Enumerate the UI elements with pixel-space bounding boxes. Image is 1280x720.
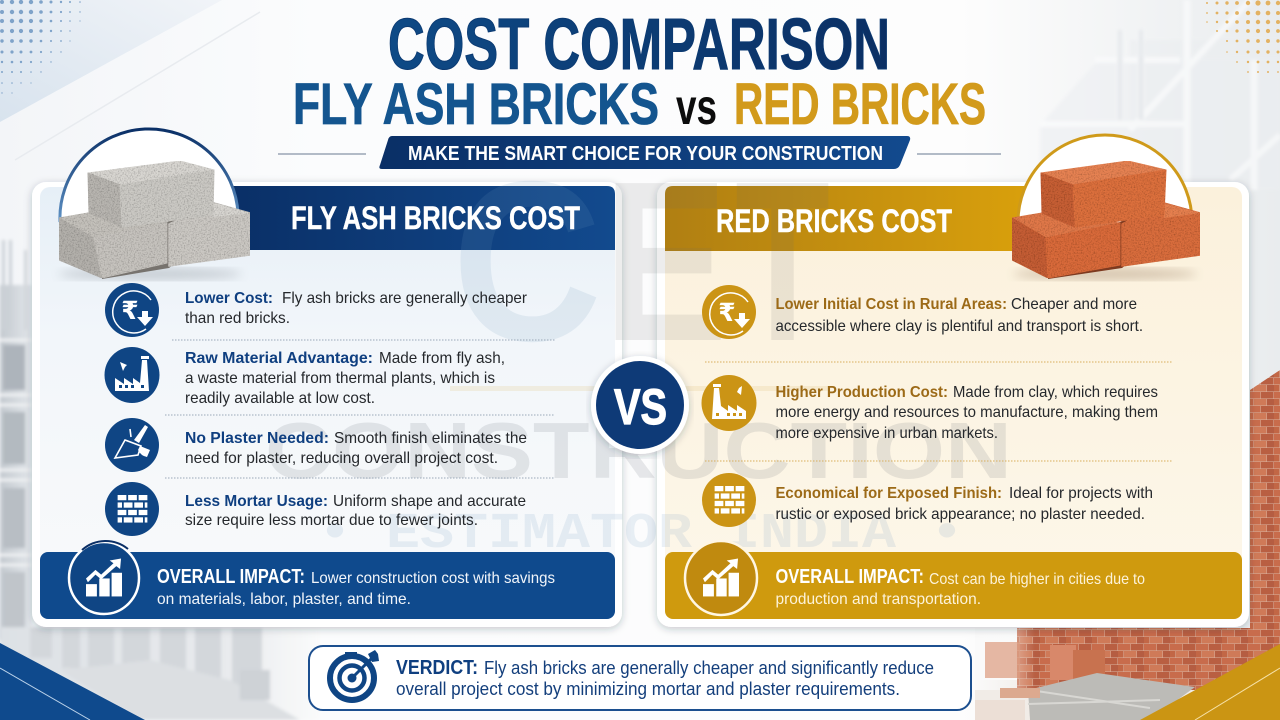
watermark: CONSTRUCTION (265, 406, 1012, 495)
watermark: T (735, 135, 830, 389)
icon: brick wall (105, 482, 159, 536)
row: higher production cost: Made from clay, which requires (953, 384, 1158, 401)
row: raw material advantage: a waste material from thermal plants, which is (185, 370, 495, 387)
fly ash impact band (40, 552, 615, 619)
red brick stack with arc (1012, 135, 1200, 280)
icon: rupee down (702, 285, 756, 339)
row: less mortar usage: size require less mortar due to fewer joints. (185, 512, 478, 529)
icon: rupee down (105, 283, 159, 337)
text: impact: OVERALL IMPACT: (776, 566, 924, 588)
subtitle: fly ash bricks vs red bricks: FLY ASH BRICKS (293, 72, 659, 137)
verdict box: overall project cost by minimizing mortar and plaster requirements. (396, 679, 900, 699)
tagline banner (278, 136, 1001, 169)
row: economical for exposed finish: rustic or exposed brick appearance; no plaster needed. (776, 506, 1145, 523)
watermark: E (603, 135, 728, 389)
text: lower initial: Lower Initial Cost in Rural Areas: (776, 296, 1007, 313)
tagline banner: MAKE THE SMART CHOICE FOR YOUR CONSTRUCTION (408, 143, 883, 165)
text: verdict: VERDICT: (396, 657, 478, 679)
title: cost comparison: COST COMPARISON (388, 5, 890, 85)
watermark (265, 135, 1012, 563)
icon: trowel (105, 418, 159, 472)
fly ash header title: FLY ASH BRICKS COST (291, 200, 580, 236)
red bricks overall impact (685, 541, 1145, 615)
top-left dots (0, 0, 81, 94)
icon: rupee down: ₹ (718, 298, 736, 327)
fly ash brick stack with arc (58, 129, 250, 280)
icon: rising chart (69, 541, 139, 614)
icon: factory (104, 347, 160, 403)
row: no plaster needed: Smooth finish eliminates the (334, 430, 527, 447)
fly ash overall impact: Lower construction cost with savings (311, 570, 555, 587)
red bricks overall impact: production and transportation. (776, 591, 981, 608)
text: less mortar: Less Mortar Usage: (185, 493, 328, 510)
text: no plaster: No Plaster Needed: (185, 430, 329, 447)
row: higher production cost: more expensive in urban markets. (776, 425, 998, 442)
row: raw material advantage: readily available at low cost. (185, 390, 375, 407)
fly ash overall impact: on materials, labor, plaster, and time. (157, 591, 411, 608)
text: impact: OVERALL IMPACT: (157, 566, 305, 588)
panel: fly ash bricks (32, 182, 622, 627)
row: less mortar usage (105, 482, 526, 536)
row: economical for exposed finish (702, 473, 1153, 527)
row: higher production cost (702, 375, 1158, 442)
vs badge: VS (614, 379, 667, 435)
watermark: • ESTIMATOR INDIA • (318, 506, 964, 563)
row: lower cost: than red bricks. (185, 310, 290, 327)
red bricks overall impact: Cost can be higher in cities due to (929, 571, 1145, 588)
row: economical for exposed finish: Ideal for projects with (1009, 485, 1153, 502)
top-left corner shape (0, 0, 222, 122)
icon: factory (702, 375, 756, 431)
icon: rupee down: ₹ (121, 296, 139, 325)
row: lower cost (105, 283, 528, 337)
red bricks header title: RED BRICKS COST (716, 203, 952, 239)
text: raw material: Raw Material Advantage: (185, 350, 373, 367)
text: lower cost: Lower Cost: (185, 290, 273, 307)
red bricks impact band (665, 552, 1242, 619)
row: no plaster needed (105, 418, 527, 472)
bottom-left construction haze (0, 627, 320, 720)
row: raw material advantage: Made from fly ash, (379, 350, 505, 367)
left scaffolding building (0, 240, 32, 640)
red bricks header band (665, 186, 1030, 251)
verdict box (309, 646, 971, 710)
text: economical: Economical for Exposed Finish: (776, 485, 1002, 502)
watermark: C (452, 135, 602, 389)
row: lower initial cost (702, 285, 1143, 339)
fly ash overall impact (69, 541, 555, 614)
row: no plaster needed: need for plaster, reducing overall project cost. (185, 450, 498, 467)
row: raw material advantage (104, 347, 505, 407)
bottom-right brick wall (975, 370, 1280, 720)
panel: red bricks (657, 182, 1249, 627)
vs badge (591, 356, 689, 454)
subtitle: fly ash bricks vs red bricks: RED BRICKS (734, 72, 986, 137)
row: lower initial cost: Cheaper and more (1011, 296, 1137, 313)
icon: rising chart (685, 541, 757, 615)
row: less mortar usage: Uniform shape and accurate (333, 493, 526, 510)
top-right faded scaffolding (1040, 0, 1280, 190)
row: lower cost: Fly ash bricks are generally cheaper (282, 290, 528, 307)
subtitle: fly ash bricks vs red bricks: vs (676, 79, 717, 135)
gold corner triangle (1140, 644, 1280, 720)
subtitle: fly ash bricks vs red bricks (293, 72, 986, 137)
row: lower initial cost: accessible where clay is plentiful and transport is short. (776, 318, 1143, 335)
fly ash header band (225, 186, 615, 250)
icon: target with arrow (330, 650, 379, 700)
icon: brick wall (702, 473, 756, 527)
row: higher production cost: more energy and resources to manufacture, making them (776, 404, 1158, 421)
verdict box: Fly ash bricks are generally cheaper and significantly reduce (484, 658, 934, 678)
top-right dots (1206, 0, 1280, 73)
navy corner triangle (0, 643, 145, 720)
text: higher production: Higher Production Cost: (776, 384, 948, 401)
